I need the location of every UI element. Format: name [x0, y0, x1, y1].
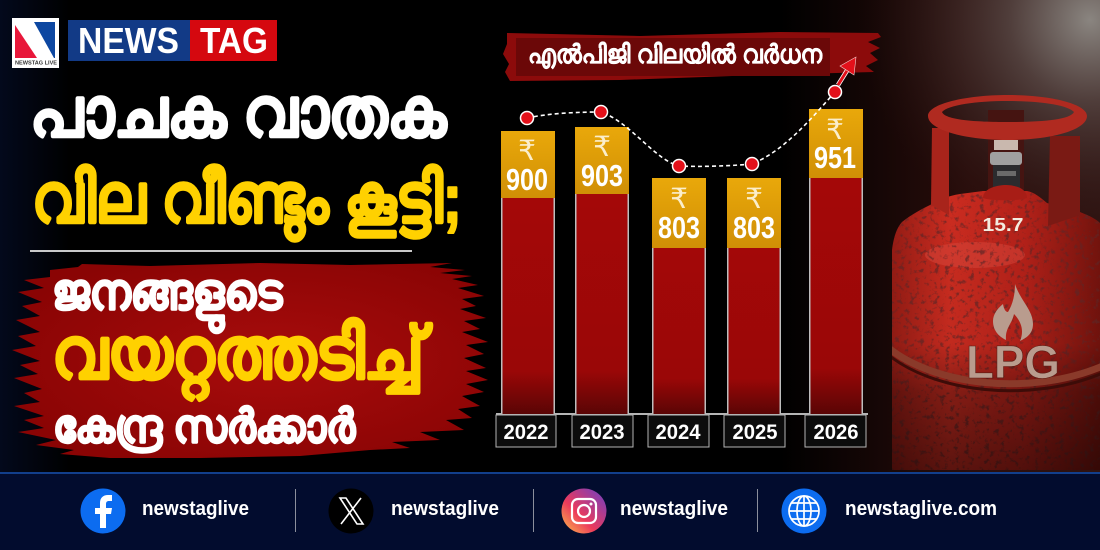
- cylinder: handle ring: [928, 95, 1087, 140]
- cylinder: 15.7 marking: 15.7: [982, 215, 1024, 235]
- social: facebook: newstaglive: [142, 498, 249, 520]
- social: website: [782, 488, 997, 534]
- year label 2025: [724, 415, 785, 447]
- bar 2022: 900: [506, 162, 548, 197]
- logo: TAG wordmark: TAG: [200, 20, 268, 61]
- year label 2022: [496, 415, 556, 447]
- brush line 3: കേന്ദ്ര സർക്കാർ: [53, 400, 356, 453]
- headline line 2: വില വീണ്ടും കൂട്ടി;: [32, 160, 462, 243]
- divider: [30, 250, 412, 252]
- icon: rising arrow: [838, 57, 856, 85]
- red brush panel: [12, 263, 488, 458]
- dividers: [295, 489, 758, 532]
- cylinder: LPG marking: LPG: [966, 336, 1060, 388]
- bar 2026: ₹: [826, 114, 844, 145]
- icon: flame: [993, 284, 1033, 341]
- social: website: newstaglive.com: [845, 498, 997, 520]
- LPG cylinder: [885, 95, 1100, 470]
- social: facebook: [80, 488, 249, 534]
- bar 2022: ₹: [518, 135, 536, 166]
- social: instagram: newstaglive: [620, 498, 728, 520]
- cylinder: neck: [983, 185, 1027, 200]
- logo: NEWS wordmark: NEWS: [78, 20, 179, 61]
- bar chart: [496, 109, 868, 447]
- logo: N emblem: NEWSTAG LIVE: [15, 60, 58, 66]
- year label 2025: 2025: [732, 421, 778, 444]
- social: X: [328, 488, 499, 534]
- bar 2025: 803: [733, 210, 775, 245]
- brush line 2: വയറ്റത്തടിച്ച്: [52, 314, 432, 401]
- logo: N emblem: [12, 18, 59, 68]
- bar 2024: 803: [658, 210, 700, 245]
- bar 2023: 903: [581, 158, 623, 193]
- bar 2026: [809, 109, 863, 414]
- logo: [12, 18, 277, 68]
- year label 2023: 2023: [580, 421, 624, 444]
- social: X: newstaglive: [391, 498, 499, 520]
- bar 2022: [501, 131, 555, 414]
- year label 2024: 2024: [656, 421, 701, 444]
- year label 2022: 2022: [504, 421, 548, 444]
- cylinder: body: [885, 190, 1100, 470]
- bar 2024: [652, 178, 706, 414]
- cylinder: left handle support: [931, 128, 949, 215]
- bar 2026: 951: [814, 140, 856, 175]
- bar 2025: ₹: [745, 183, 763, 214]
- trend line with points: [520, 86, 842, 172]
- baseline: [496, 413, 868, 415]
- bar 2025: [727, 178, 781, 414]
- year label 2026: 2026: [814, 421, 858, 444]
- chart banner: [503, 32, 881, 81]
- headline line 1: പാചക വാതക: [30, 74, 447, 151]
- year label 2023: [572, 415, 633, 447]
- cylinder: valve: [990, 152, 1022, 190]
- bar 2024: ₹: [670, 183, 688, 214]
- cylinder: right handle support: [1048, 136, 1080, 226]
- footer: [0, 472, 1100, 550]
- bar 2023: [575, 127, 629, 414]
- bar 2023: ₹: [593, 131, 611, 162]
- banner text: എൽപിജി വിലയിൽ വർധന: [528, 39, 823, 70]
- social: instagram: [562, 488, 728, 534]
- year label 2026: [805, 415, 866, 447]
- cylinder: rear handle strut: [988, 110, 1024, 195]
- brush line 1: ജനങ്ങളുടെ: [52, 264, 283, 334]
- year label 2024: [648, 415, 709, 447]
